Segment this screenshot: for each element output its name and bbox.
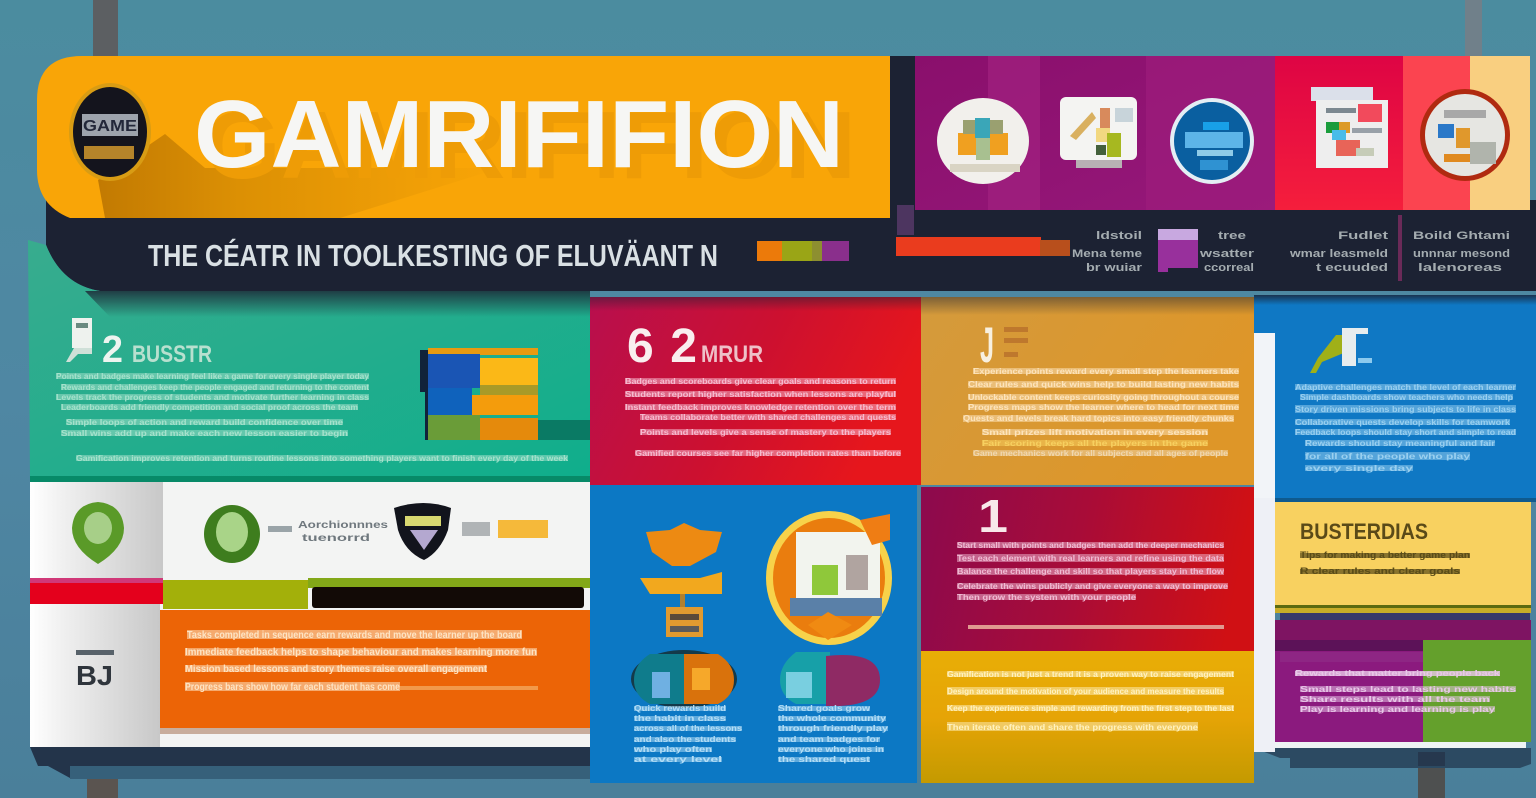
- badge icon: [69, 83, 151, 181]
- legend row: [896, 205, 1510, 281]
- body copy: [963, 366, 1239, 437]
- red progress bar: [896, 205, 1070, 256]
- legend text A: br wuiar: [1086, 262, 1143, 274]
- step number: 2: [102, 329, 123, 371]
- purple note: Small steps lead to lasting new habits: [1300, 684, 1516, 694]
- yellow note: R clear rules and clear goals: [1300, 566, 1460, 576]
- caption text: tuenorrd: [302, 533, 370, 544]
- icon: round chart badge: [1420, 89, 1510, 181]
- icon: document: [1311, 87, 1388, 168]
- purple note: [1275, 620, 1531, 742]
- legend text A: Mena teme: [1072, 248, 1142, 260]
- orange body panel: [160, 610, 590, 734]
- body copy: Badges and scoreboards give clear goals and reasons to return: [625, 376, 896, 386]
- body copy: Small wins add up and make each new lesson easier to begin: [61, 428, 348, 438]
- panel: yellow callout: Keep the experience simple and rewarding from the first step to the last: [947, 703, 1234, 713]
- icon: book stack: [420, 348, 590, 440]
- legend text D: lalenoreas: [1418, 262, 1502, 274]
- panel: red stat: [590, 297, 921, 485]
- column text right: everyone who joins in: [778, 744, 884, 754]
- body copy: for all of the people who play: [1305, 451, 1470, 461]
- caption text: [268, 520, 389, 544]
- body copy: Teams collaborate better with shared challenges and quests: [640, 412, 896, 422]
- icon: small document: BJ: [76, 660, 113, 691]
- panel: yellow callout: Design around the motivation of your audience and measure the results: [947, 686, 1224, 696]
- step heading: BUSSTR: [132, 341, 212, 368]
- body copy: Levels track the progress of students and motivate further learning in class: [56, 392, 369, 402]
- body copy: Then grow the system with your people: [957, 592, 1136, 602]
- body copy: Gamified courses see far higher completion rates than before: [635, 448, 901, 458]
- body copy: Quests and levels break hard topics into easy friendly chunks: [963, 413, 1234, 423]
- legend text A: ldstoil: [1096, 230, 1142, 242]
- color swatch strip: [757, 241, 849, 261]
- body copy: Progress maps show the learner where to head for next time: [968, 402, 1239, 412]
- column text right: and team badges for: [778, 734, 881, 744]
- legend text B: [1199, 230, 1255, 274]
- panel: yellow callout: Then iterate often and share the progress with everyone: [947, 722, 1198, 732]
- legend text D: Boild Ghtami: [1413, 230, 1510, 242]
- legend text D: unnnar mesond: [1413, 248, 1510, 260]
- column text left: who play often: [633, 744, 712, 754]
- icon: green puzzle: [1310, 328, 1372, 373]
- body copy: [625, 376, 901, 458]
- legend text B: wsatter: [1199, 248, 1255, 260]
- body copy: Leaderboards add friendly competition and social proof across the team: [61, 402, 358, 412]
- column text left: and also the students: [634, 734, 736, 744]
- legend text A: [1072, 230, 1143, 274]
- title banner: [37, 56, 890, 218]
- panel: yellow callout: [921, 651, 1254, 783]
- column text left: Quick rewards build: [634, 703, 726, 713]
- panel: white achievements: [30, 482, 590, 747]
- small badge caption: [462, 520, 548, 538]
- purple note: Rewards that matter bring people back: [1295, 668, 1500, 678]
- body copy: [1295, 382, 1517, 473]
- panel: tan step: [921, 297, 1254, 485]
- icon strip panel: [915, 56, 1530, 210]
- panel: tan step: Fair scoring keeps all the players in the game: [982, 438, 1208, 448]
- body copy: Small prizes lift motivation in every session: [982, 427, 1208, 437]
- body copy: Points and badges make learning feel like a game for every single player today: [56, 371, 369, 381]
- body copy: Simple dashboards show teachers who needs help: [1300, 392, 1513, 402]
- body copy: Rewards and challenges keep the people engaged and returning to the content: [61, 382, 369, 392]
- title shadow: [98, 134, 500, 218]
- body copy: Experience points reward every small step the learners take: [973, 366, 1239, 376]
- panel: tan step: Game mechanics work for all subjects and all ages of people: [973, 448, 1228, 458]
- column text right: Shared goals grow: [778, 703, 870, 713]
- body copy: [957, 540, 1228, 602]
- note heading: BUSTERDIAS: [1300, 519, 1428, 544]
- orange body panel: Mission based lessons and story themes raise overall engagement: [185, 664, 488, 675]
- panel: yellow callout: Gamification is not just a trend it is a proven way to raise engagement: [947, 669, 1234, 679]
- stat number: 6 2: [627, 320, 697, 373]
- body copy: Start small with points and badges then add the deeper mechanics: [957, 540, 1224, 550]
- step icon: [66, 318, 92, 362]
- icon: round book badge: [766, 511, 892, 645]
- body copy: Story driven missions bring subjects to life in class: [1295, 404, 1516, 414]
- icon: black shield badge: [394, 503, 451, 560]
- column text right: the shared quest: [778, 754, 870, 764]
- panel: green step: [28, 240, 590, 482]
- body copy: Clear rules and quick wins help to build lasting new habits: [968, 379, 1239, 389]
- stat label: MRUR: [701, 341, 763, 368]
- body copy: Balance the challenge and skill so that players stay in the flow: [957, 566, 1224, 576]
- icon: teal and orange pill: [631, 650, 737, 708]
- purple note: Play is learning and learning is play: [1300, 704, 1495, 714]
- legend text B: tree: [1218, 230, 1246, 242]
- body copy: Points and levels give a sense of mastery to the players: [640, 427, 891, 437]
- column text left: the habit in class: [634, 713, 726, 723]
- column text left: [633, 703, 742, 764]
- body copy: Test each element with real learners and refine using the data: [957, 553, 1224, 563]
- body copy: Gamification improves retention and turns routine lessons into something players want to finish every day of the week: [76, 453, 568, 463]
- legend text C: t ecuuded: [1316, 262, 1388, 274]
- column text left: across all of the lessons: [634, 723, 742, 733]
- title banner: GAMRIFIFION: [204, 92, 856, 199]
- icon: chart card: [1060, 97, 1137, 168]
- title text: GAMRIFIFION: [194, 81, 844, 188]
- red tab: [30, 578, 163, 604]
- body copy: Celebrate the wins publicly and give everyone a way to improve: [957, 581, 1228, 591]
- icon: blue globe: [1170, 98, 1254, 184]
- body copy: Students report higher satisfaction when lessons are playful: [625, 389, 896, 399]
- body copy: [56, 371, 568, 463]
- dark header band: [46, 56, 1536, 291]
- legend text C: [1289, 230, 1389, 274]
- column text right: the whole community: [778, 713, 886, 723]
- icon: teal and plum pill: [780, 652, 880, 706]
- icon: green gem: [204, 505, 260, 563]
- step numeral: J: [980, 317, 994, 373]
- legend text C: wmar leasmeld: [1289, 248, 1388, 260]
- purple flag: [1158, 229, 1198, 272]
- body copy: Collaborative quests develop skills for teamwork: [1295, 417, 1510, 427]
- body copy: every single day: [1305, 463, 1413, 473]
- lime tab: [163, 580, 308, 609]
- column text left: at every level: [634, 754, 722, 764]
- yellow note: Tips for making a better game plan: [1300, 550, 1470, 560]
- body copy: Adaptive challenges match the level of each learner: [1295, 382, 1517, 392]
- icon: green shield: [72, 502, 124, 564]
- step numeral: 1: [978, 490, 1008, 542]
- body copy: Unlockable content keeps curiosity going throughout a course: [968, 392, 1239, 402]
- icon: trophy signpost: [640, 523, 722, 637]
- panel: crimson step: [921, 487, 1254, 651]
- legend text C: Fudlet: [1338, 230, 1389, 242]
- orange body panel: Progress bars show how far each student has come: [185, 682, 400, 693]
- panel: blue center: [590, 485, 917, 783]
- yellow note: [1275, 498, 1536, 620]
- caption text: Aorchionnnes: [298, 520, 389, 531]
- body copy: Instant feedback improves knowledge retention over the term: [625, 402, 896, 412]
- subtitle: THE CÉATR IN TOOLKESTING OF ELUVÄANT N: [148, 238, 718, 273]
- orange body panel: Immediate feedback helps to shape behaviour and makes learning more fun: [185, 647, 537, 658]
- legend text B: ccorreal: [1204, 262, 1254, 274]
- body copy: Simple loops of action and reward build confidence over time: [66, 417, 343, 427]
- body copy: Feedback loops should stay short and simple to read: [1295, 427, 1516, 437]
- purple note: Share results with all the team: [1300, 694, 1491, 704]
- black tab: [308, 578, 590, 608]
- badge icon: GAME: [83, 118, 137, 135]
- legend text D: [1413, 230, 1510, 274]
- column text right: through friendly play: [778, 723, 888, 733]
- panel: blue right: [1254, 295, 1536, 498]
- panel: right column lower: [1254, 498, 1536, 752]
- body copy: Rewards should stay meaningful and fair: [1305, 438, 1496, 448]
- column text right: [778, 703, 888, 764]
- orange body panel: Tasks completed in sequence earn rewards and move the learner up the board: [187, 630, 522, 641]
- icon: chart plate: [937, 98, 1029, 184]
